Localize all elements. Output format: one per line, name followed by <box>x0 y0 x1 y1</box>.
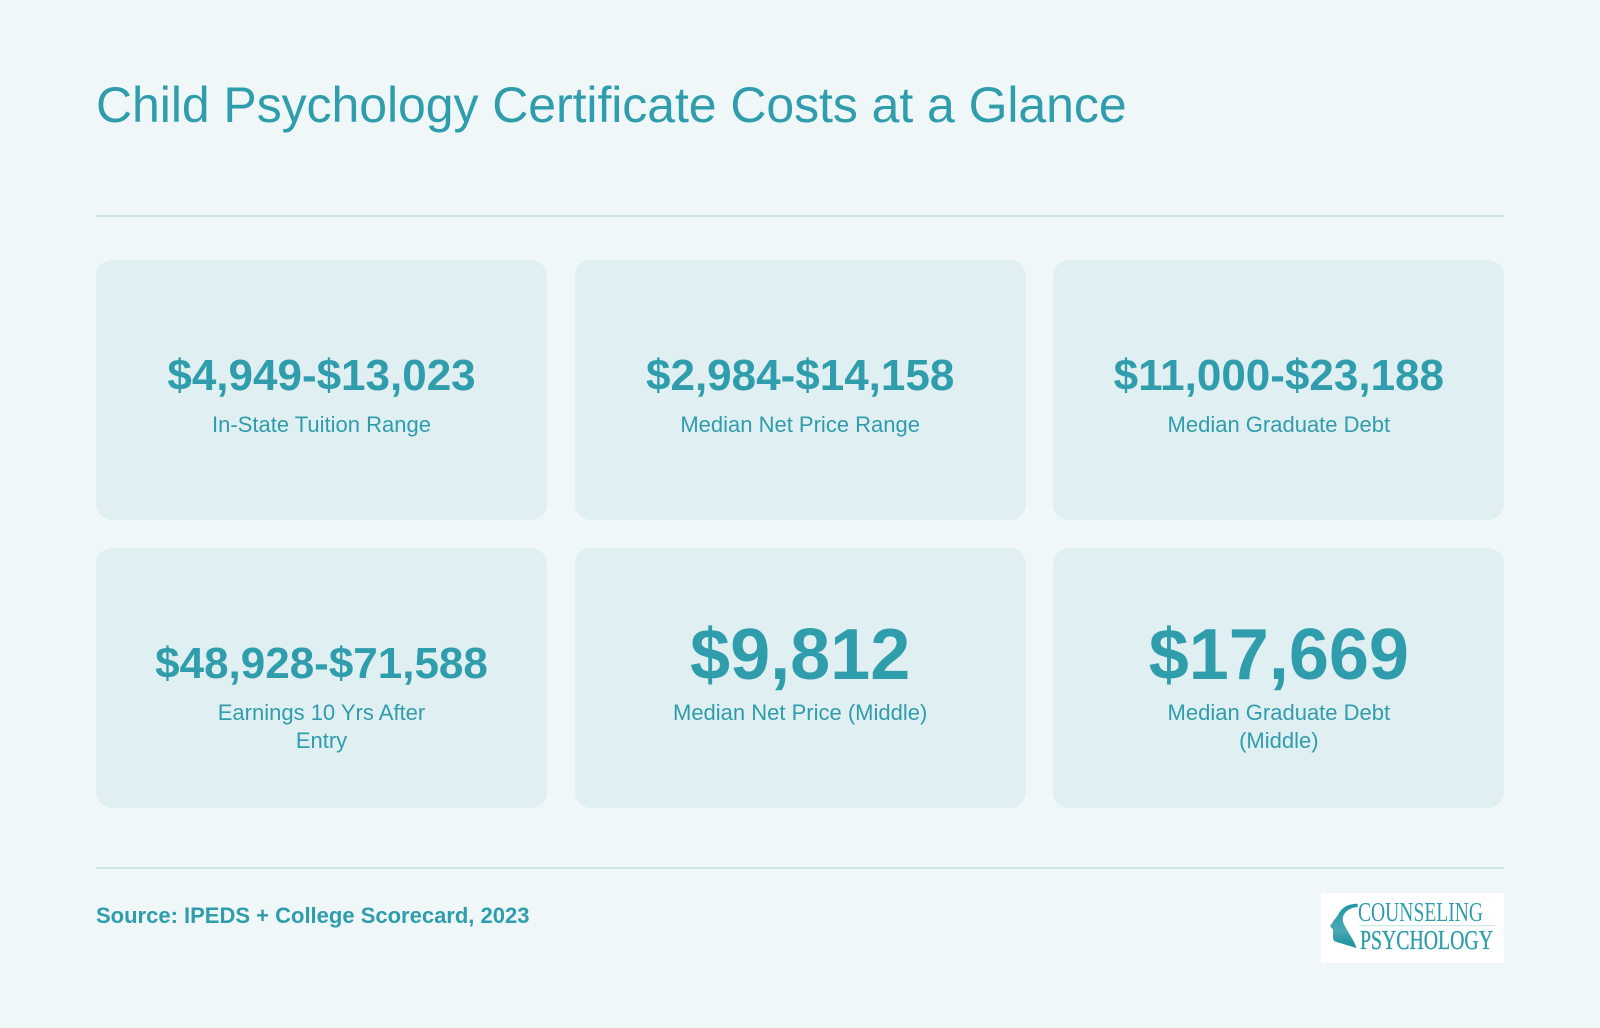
label: Median Graduate Debt <box>1168 700 1390 725</box>
logo: Counseling Psychology <box>1321 893 1504 963</box>
card: median graduate debt <box>1053 260 1504 520</box>
value: $17,669 <box>1149 615 1409 695</box>
value: $11,000-$23,188 <box>1114 351 1444 400</box>
label: Median Graduate Debt <box>1168 412 1390 437</box>
label: Earnings 10 Yrs After <box>218 700 425 725</box>
card: median net price middle <box>575 548 1026 808</box>
card: in-state tuition range <box>96 260 547 520</box>
value: $9,812 <box>690 615 910 695</box>
label: In-State Tuition Range <box>212 412 431 437</box>
label <box>1168 700 1390 753</box>
icon: head profile <box>1330 904 1358 948</box>
card: median net price range <box>575 260 1026 520</box>
label: Entry <box>296 728 347 753</box>
value: $48,928-$71,588 <box>155 639 488 688</box>
label: Median Net Price Range <box>680 412 920 437</box>
card: median graduate debt middle <box>1053 548 1504 808</box>
card: earnings 10 years after entry <box>96 548 547 808</box>
value: $2,984-$14,158 <box>646 351 954 400</box>
title: Child Psychology Certificate Costs at a Glance <box>96 77 1127 133</box>
label <box>218 700 425 753</box>
label: (Middle) <box>1239 728 1319 753</box>
wordmark <box>1358 897 1495 955</box>
source note: Source: IPEDS + College Scorecard, 2023 <box>96 903 529 928</box>
label: Median Net Price (Middle) <box>673 700 927 725</box>
value: $4,949-$13,023 <box>167 351 476 400</box>
